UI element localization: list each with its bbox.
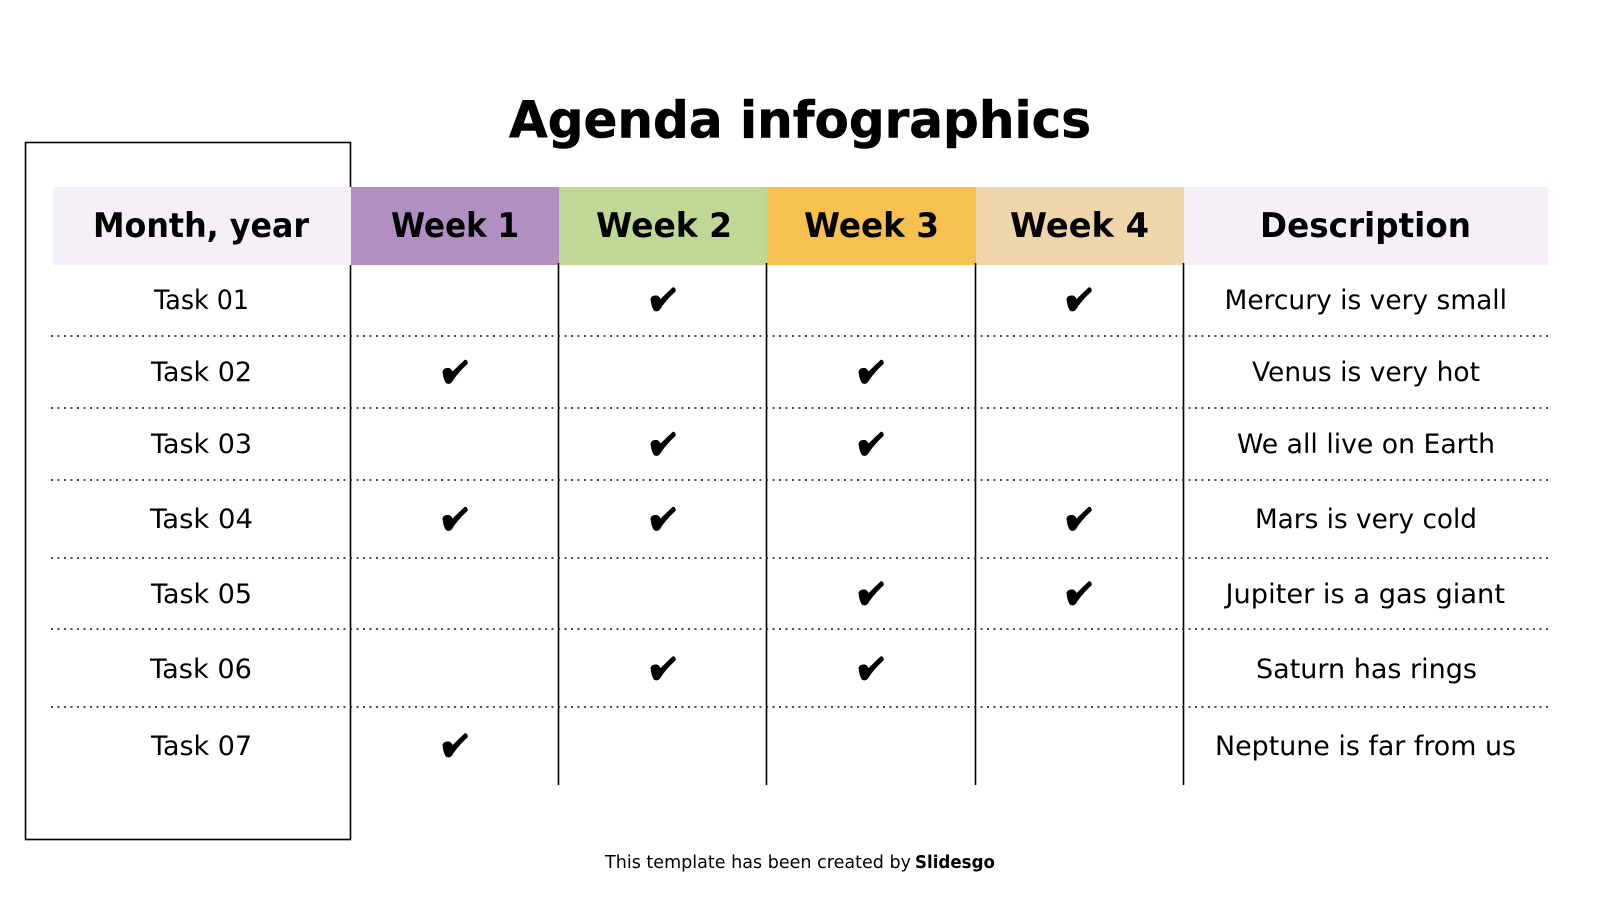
task labels: Task 05 — [150, 579, 252, 610]
header cell: week 3 — [767, 187, 976, 265]
header cell: week 4: Week 4 — [1010, 206, 1149, 245]
header cell: week 2 — [559, 187, 767, 265]
title: Agenda infographics — [509, 92, 1091, 150]
header cell: week 3: Week 3 — [804, 206, 939, 245]
task labels: Task 04 — [149, 504, 253, 535]
descriptions: Saturn has rings — [1256, 654, 1477, 685]
descriptions: Mars is very cold — [1255, 504, 1477, 535]
descriptions: Jupiter is a gas giant — [1223, 579, 1505, 610]
header cell: description: Description — [1260, 206, 1471, 245]
footer credit: This template has been created by — [604, 852, 911, 873]
header cell: week 2: Week 2 — [596, 206, 732, 245]
descriptions: Venus is very hot — [1252, 357, 1480, 388]
check marks — [442, 287, 1092, 757]
header cell: week 1: Week 1 — [391, 206, 519, 245]
descriptions: We all live on Earth — [1237, 429, 1495, 460]
descriptions — [1215, 285, 1516, 762]
header cell: week 1 — [351, 187, 559, 265]
task labels — [149, 285, 253, 762]
grid lines — [51, 263, 1548, 785]
descriptions: Mercury is very small — [1224, 285, 1507, 316]
descriptions: Neptune is far from us — [1215, 731, 1516, 762]
footer credit: Slidesgo — [915, 852, 995, 873]
table header row — [53, 187, 1548, 265]
outlined frame: left column — [26, 142, 350, 840]
task labels: Task 07 — [150, 731, 252, 762]
header cell: week 4 — [976, 187, 1184, 265]
header cell: description — [1184, 187, 1548, 265]
header cell: month, year — [53, 187, 351, 265]
task labels: Task 01 — [153, 285, 249, 316]
task labels: Task 06 — [149, 654, 252, 685]
header cell: month, year: Month, year — [93, 206, 309, 245]
task labels: Task 02 — [150, 357, 252, 388]
task labels: Task 03 — [150, 429, 252, 460]
